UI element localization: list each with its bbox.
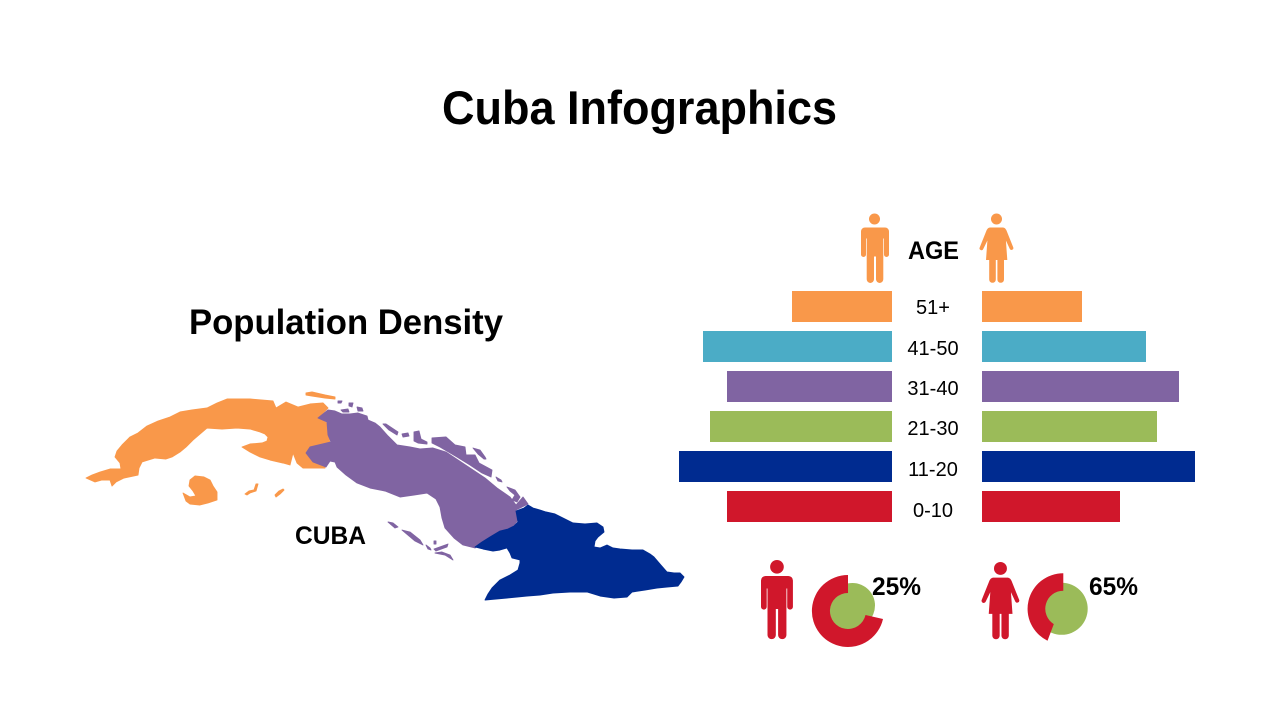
row: 31-40: 31-40	[907, 378, 959, 400]
row: 11-20	[679, 451, 1195, 482]
icon: male, orange	[861, 214, 889, 283]
value: 25%: 25%	[872, 573, 921, 601]
map of Cuba	[86, 392, 684, 600]
icon: female, red	[982, 562, 1019, 639]
icon: male, red	[761, 560, 793, 639]
row: 0-10	[727, 491, 1120, 522]
donut chart: male 25%	[812, 575, 883, 647]
row: 11-20: 11-20	[908, 459, 958, 481]
row: 21-30: 21-30	[907, 418, 959, 440]
row: 21-30	[710, 411, 1157, 442]
row: 41-50	[703, 331, 1146, 362]
row: 41-50: 41-50	[907, 338, 959, 360]
population pyramid	[679, 291, 1195, 522]
map label: CUBA: CUBA	[295, 522, 366, 550]
donut chart: female 65%	[1028, 573, 1088, 641]
row: 51+	[792, 291, 1082, 322]
value: 65%: 65%	[1089, 573, 1138, 601]
region: western (orange)	[86, 392, 335, 505]
region: central (purple)	[306, 401, 528, 560]
heading: age: AGE	[908, 237, 959, 265]
region: eastern (navy)	[475, 505, 684, 600]
heading: population density: Population Density	[189, 303, 504, 342]
icon: female, orange	[980, 214, 1013, 283]
row: 0-10: 0-10	[913, 500, 953, 522]
row: 51+: 51+	[916, 297, 950, 319]
title: Cuba Infographics	[442, 81, 837, 134]
row: 31-40	[727, 371, 1179, 402]
